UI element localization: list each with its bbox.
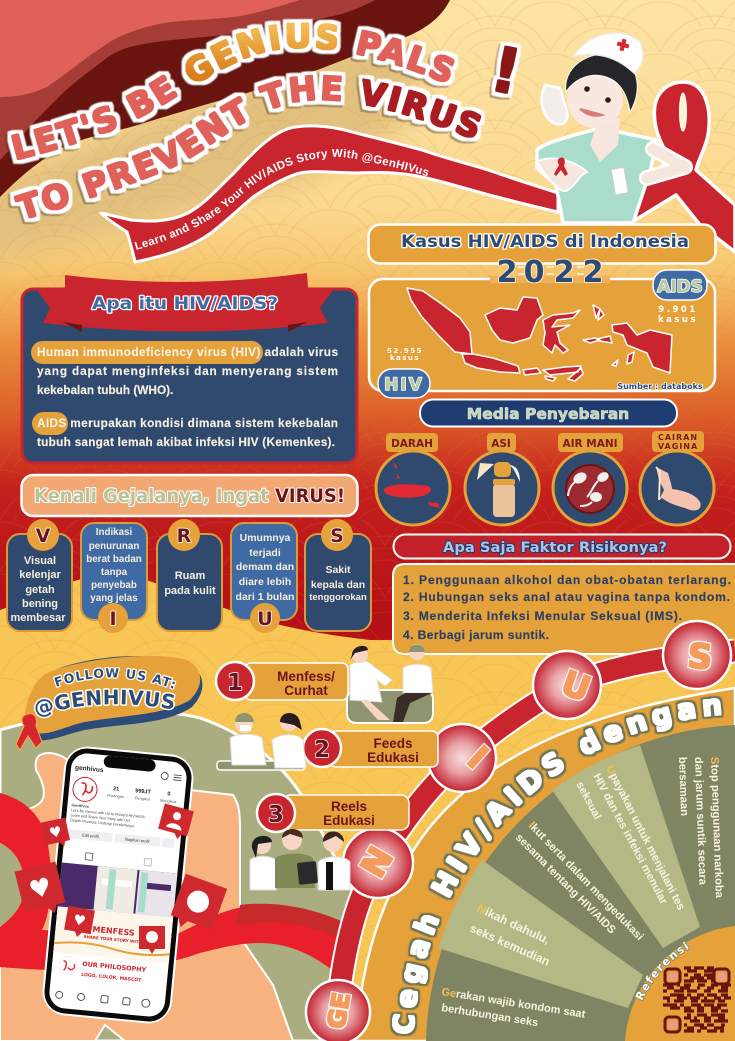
red ribbon [0,793,352,988]
AIDS badge [653,270,707,300]
ball: I [428,724,496,792]
icon: big heart: ♥ [26,872,55,905]
card: I: Indikasi [96,527,133,538]
card: U: diare lebih [239,576,291,588]
panel: faktor risiko list [393,564,735,654]
lower yellow area [0,579,735,988]
step 2: 2 [314,737,330,763]
panel: map of Indonesia: kasus [658,315,698,325]
AIDS count: 9.901 [658,305,698,315]
profile buttons [68,829,113,842]
ball: GE [306,980,370,1041]
icon: breast pump [477,463,494,480]
year 2022 [490,258,610,284]
prevention fan [354,686,735,1041]
philosophy post [58,956,78,975]
ball: I: I [459,739,495,777]
illustration: vaccination [217,713,306,770]
year 2022: 2 [583,255,603,290]
card: U: Umumnya [240,532,291,544]
profile stats: 21 [113,786,119,793]
heading ribbon [37,273,333,332]
media: ASI [465,433,539,525]
media: darah [376,433,450,525]
HIV badge [378,369,430,398]
HIV count: 52.955 [387,347,423,355]
hand and arm [0,753,293,1041]
prevention fan: bersamaan [676,757,690,816]
card: I: I [109,608,117,630]
panel: map of Indonesia: kasus [390,354,420,362]
card: R: pada kulit [164,585,216,597]
QR disc [625,926,735,1041]
panel: kasus header: Kasus HIV/AIDS di Indonesia [401,232,689,252]
body text: tubuh sangat lemah akibat infeksi HIV (Kemenkes). [37,435,335,449]
ball: S [663,621,731,689]
panel: faktor risiko list: 4. Berbagi jarum suntik. [403,628,549,642]
panel: faktor risiko list: 2. Hubungan seks anal atau vagina tanpa kondom. [403,590,730,604]
step 2: Edukasi [367,750,419,765]
ball: GE: GE [322,990,356,1031]
ball: N: N [353,840,402,885]
title: TO PREVENT THE VIRUS [8,70,486,224]
referensi label: Referensi [635,942,690,1001]
profile bio: Cegah Virusnya, Lindungi Pendertanya [70,818,135,828]
map [407,288,672,381]
step 1: Menfess/ [277,669,335,684]
nav bar [55,991,150,1008]
slice text: Ge: Gerakan wajib kondom saat [441,986,586,1021]
icon: hand [656,467,701,510]
pin ribbon [554,157,568,176]
card: V: Visual [24,555,56,567]
card: V: getah [25,584,55,596]
background [0,0,735,640]
card: V [7,519,72,631]
media: cairan vagina: VAGINA [658,442,698,451]
phone mockup: LOGO, COLOR, MASCOT [81,972,142,984]
card: S: tenggorokan [309,592,367,603]
step 2 [303,729,438,767]
body text: Human immunodeficiency virus (HIV) adalah virus [37,345,338,359]
panel: faktor risiko list: 1. Penggunaan alkohol dan obat-obatan terlarang. [403,573,731,587]
profile stats: 999JT [135,788,152,796]
fan heading: Cegah HIV/AIDS dengan [389,696,724,1037]
media: air mani [553,433,627,525]
card: S [305,519,371,631]
top-left wave corner [0,0,450,197]
icon: small heart: ♥ [48,824,64,842]
prevention fan: seks kemudian [468,921,552,969]
AIDS badge: AIDS [657,277,703,297]
profile bio: Learn and Share Your Story with Us! [70,813,130,823]
media: cairan vagina [640,431,714,525]
HIV badge: HIV [384,375,424,395]
slice text: S: S top penggunaan narkoba [708,757,725,899]
faktor risiko heading: Apa Saja Faktor Risikonya? [443,540,667,556]
highlight: HIV [31,341,263,364]
body text: kekebalan tubuh (WHO). [37,383,173,397]
QR code [663,968,731,1032]
profile stats: 0 [167,791,171,798]
media penyebaran heading: Media Penyebaran [467,405,629,423]
card: I: yang jelas [90,593,138,604]
step 3 [257,794,409,832]
profile bio: Let's Be Genius with Us to Prevent HIV/AIDS! [71,808,146,819]
follow us blob: FOLLOW US AT: [53,667,176,690]
ball: U [533,651,601,719]
body text: AIDS merupakan kondisi dimana sistem kekebalan [37,416,338,430]
year 2022: 2 [497,255,517,290]
icon: cell [566,465,614,513]
card: I: penurunan [89,541,139,552]
card: V: kelenjar [19,569,62,581]
ball: N [343,828,413,898]
step 3: Edukasi [323,813,375,828]
grid thumbnails [58,863,177,917]
icon: small ribbon [16,714,42,750]
card: R [157,519,222,631]
card: S: S [330,525,344,547]
card: V: membesar [10,612,66,624]
big red ribbon behind nurse [632,82,735,252]
icon: big comment [168,874,227,938]
icon: profile [157,804,194,841]
green area with hand and ribbon [0,711,352,1041]
phone mockup: Postingan [107,794,124,799]
panel: faktor risiko list: 3. Menderita Infeksi Menular Seksual (IMS). [403,609,682,623]
prevention fan: HIV dan tes infeksi menular [590,772,670,907]
card: V: V [36,525,51,547]
slices [426,725,735,1041]
faktor risiko heading [394,534,730,558]
prevention fan: seksual [573,780,603,822]
illustration: education [250,829,350,890]
phone mockup: Mengikuti [160,799,177,804]
step 2: Feeds [373,736,413,751]
banner ribbon [100,124,560,264]
prevention fan: sesama tentang HIV/AIDS [513,832,618,937]
heading ribbon: Apa itu HIV/AIDS? [92,294,278,314]
source note: Sumber : databoks [617,382,703,391]
card: I: berat badan [86,554,142,565]
phone mockup: OUR PHILOSOPHY [82,960,147,974]
profile header: genhivus [75,764,104,774]
icon: post heart: ♥ [72,912,87,930]
icon: post heart [63,906,95,939]
card: R: R [177,525,192,547]
banner text: Learn and Share Your HIV/AIDS Story With @GenHIVus [134,148,428,250]
panel: kenali gejalanya: Kenali Gejalanya, Ingat VIRUS! [34,485,345,507]
panel: kenali gejalanya [22,475,358,516]
phone mockup: Bagikan profil [125,837,150,844]
ball: U: U [556,663,596,710]
road with letter balls [306,621,735,1041]
media: ASI: ASI [491,438,511,450]
icon: post comment [139,926,165,954]
card: S: Sakit [325,564,351,576]
ball: S: S [686,636,714,678]
step 3: 3 [268,802,284,828]
year 2022: 0 [524,255,544,290]
step 3: Reels [331,799,367,814]
cap cross [616,38,630,52]
phone mockup: Pengikut [135,796,151,802]
follow us blob: @GENHIVUS [34,688,176,718]
card: V: bening [22,598,58,610]
highlight: AIDS [32,412,68,435]
icon: small heart [41,818,71,850]
title [5,18,522,224]
card: U: terjadi [249,547,281,559]
title: LET'S BE GENIUS PALS [5,18,459,166]
illustration: consultation [347,644,433,723]
slice text: I: Ikut serta dalam mengedukasi [526,820,645,943]
notification icons [15,804,227,954]
panel: map of Indonesia [369,270,715,398]
card: I: penyebab [91,580,137,591]
orange disc [355,688,735,1041]
panel: kasus header [368,224,716,264]
icon: blood [384,461,440,508]
step 1: Curhat [284,683,328,698]
card: I [81,523,147,633]
exclamation mark: ! [485,32,527,109]
media: darah: DARAH [391,438,433,450]
body text: yang dapat menginfeksi dan menyerang sistem [37,364,338,378]
media penyebaran heading [420,400,677,426]
step 1 [216,662,348,700]
media: cairan vagina: CAIRAN [658,433,698,442]
nurse character [537,33,685,223]
card: U: U [257,608,273,630]
menfess post: MENFESS [92,925,135,938]
panel: apa itu HIV/AIDS [22,273,357,463]
follow us blob [16,656,202,751]
slice text: U: Upayakan untuk menjalani tes [603,764,687,912]
step 1: 1 [227,670,243,696]
card: R: Ruam [175,570,205,582]
card: I: tanpa [101,567,128,578]
phone mockup: Edit profil [82,832,99,839]
card: U [231,523,297,633]
profile bio: GenHIVus [71,803,89,809]
media: air mani: AIR MANI [562,438,618,450]
card: U: dari 1 bulan [236,591,294,603]
prevention fan: dan jarum suntik secara [692,757,708,886]
card: S: kepala dan [311,579,365,591]
icon: big heart [15,862,67,920]
card: U: demam dan [236,561,294,573]
phone mockup: SHARE YOUR STORY WITH [83,934,142,945]
prevention fan: berhubungan seks [441,1002,539,1029]
year 2022: 2 [554,255,574,290]
phone mockup [40,744,196,1026]
slice text: N: Nikah dahulu, [475,901,552,947]
body text [37,345,338,449]
